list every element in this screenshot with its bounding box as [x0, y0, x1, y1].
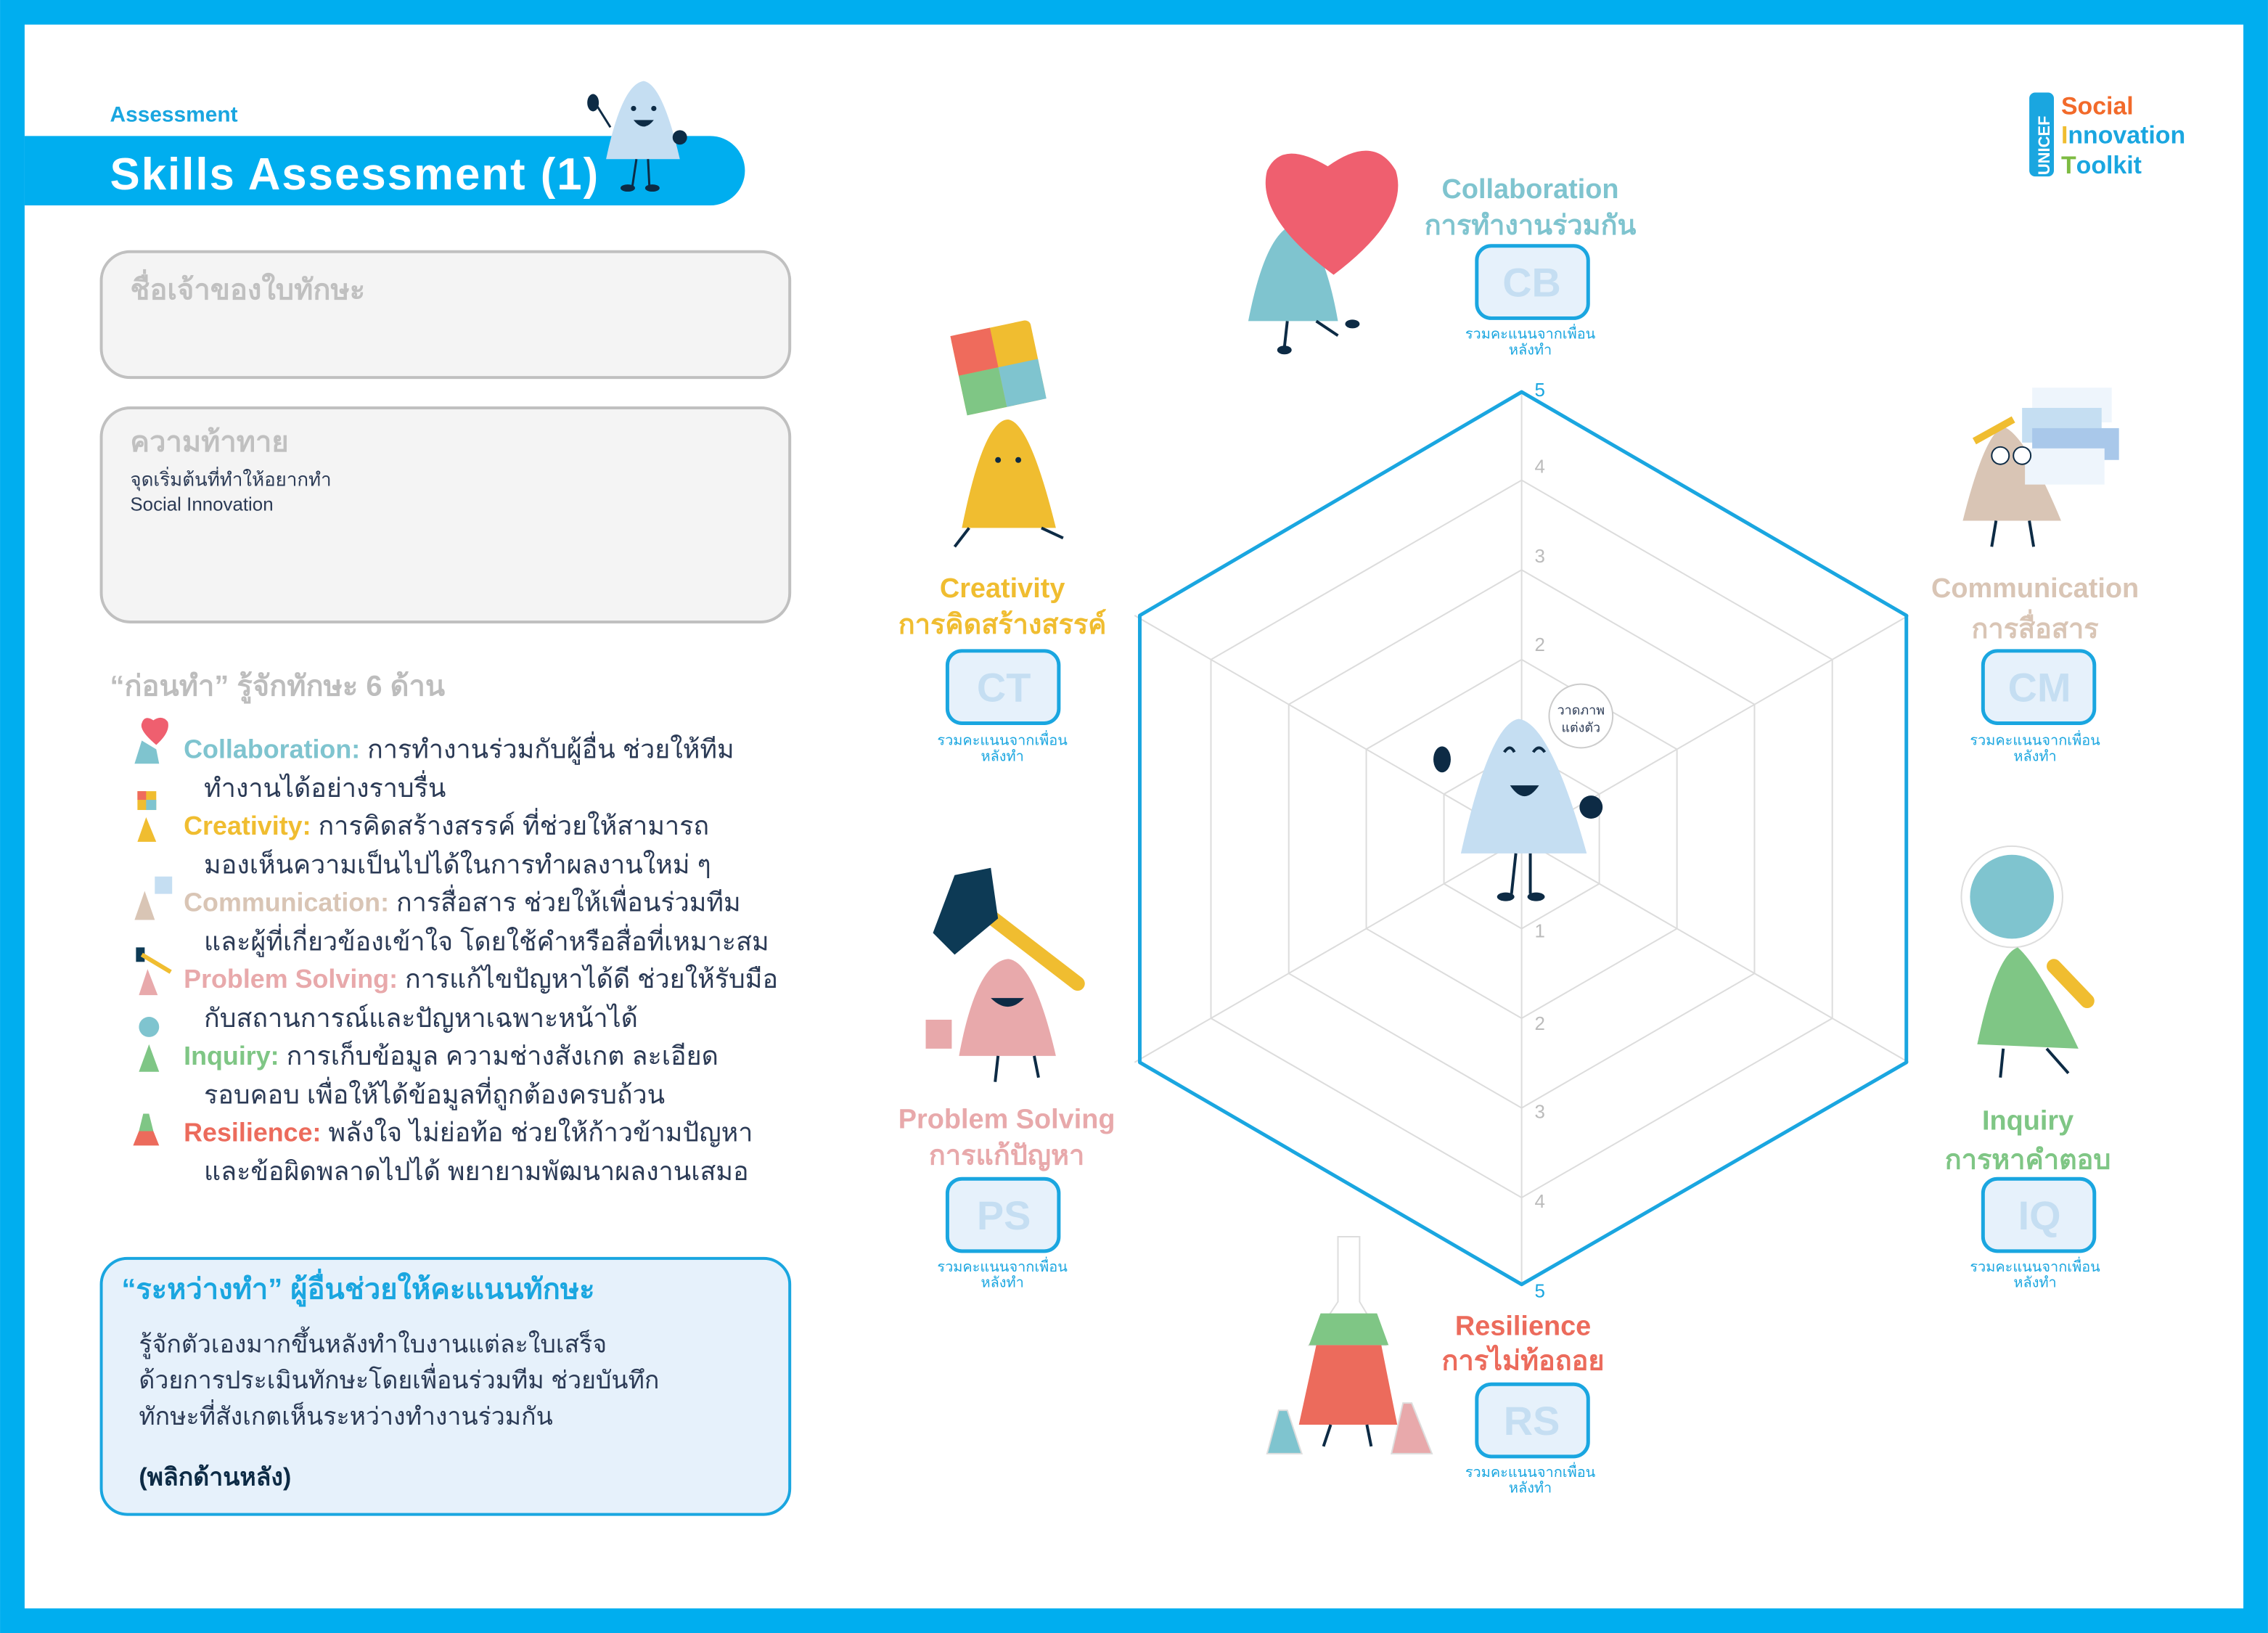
panel: challenge: Social Innovation: [130, 494, 274, 515]
skill: inquiry: IQ: [2018, 1192, 2061, 1238]
skill: problem solving: [898, 1104, 1115, 1291]
icon: heart character: [1248, 151, 1398, 354]
panel: during: [102, 1258, 790, 1515]
panel: during: รู้จักตัวเองมากขึ้นหลังทำใบงานแต่ละใบเสร็จ: [139, 1326, 607, 1359]
skill: collaboration: [1425, 174, 1637, 358]
center mascot with bubble: แต่งตัว: [1561, 720, 1600, 734]
radar chart: 3: [1535, 1102, 1545, 1123]
skill: communication: [1931, 573, 2139, 764]
skill: collaboration: Collaboration: [1442, 174, 1619, 205]
skill: inquiry: การหาคำตอบ: [1945, 1145, 2111, 1175]
icon: small puzzle: [137, 791, 156, 842]
skills list: Communication: การสื่อสาร ช่วยให้เพื่อนร่วมทีม: [184, 885, 741, 917]
center mascot with bubble: วาดภาพ: [1557, 703, 1605, 717]
panel: challenge: [102, 408, 790, 622]
skill: collaboration: รวมคะแนนจากเพื่อน: [1465, 323, 1596, 342]
panel: during: ด้วยการประเมินทักษะโดยเพื่อนร่วมทีม ช่วยบันทึก: [139, 1363, 659, 1394]
icon: papers character: [1962, 388, 2119, 547]
skill: communication: CM: [2008, 665, 2071, 711]
panel: during: ทักษะที่สังเกตเห็นระหว่างทำงานร่วมกัน: [139, 1399, 553, 1431]
skill: resilience: RS: [1504, 1398, 1560, 1444]
logo: Innovation: [2061, 121, 2185, 149]
skill: creativity: รวมคะแนนจากเพื่อน: [937, 729, 1068, 748]
skill: resilience: การไม่ท้อถอย: [1442, 1344, 1605, 1376]
skill: collaboration: CB: [1502, 260, 1561, 306]
skills list: Inquiry: การเก็บข้อมูล ความช่างสังเกต ละเอียด: [184, 1039, 719, 1071]
skill: problem solving: Problem Solving: [898, 1104, 1115, 1134]
icon: magnifier character: [1961, 846, 2087, 1078]
radar chart: 2: [1535, 1014, 1545, 1034]
skills list: ทำงานได้อย่างราบรื่น: [204, 770, 446, 803]
icon: small hammer: [136, 947, 171, 995]
icon: small heart: [134, 718, 168, 764]
radar chart: 2: [1535, 635, 1545, 655]
skill: problem solving: หลังทำ: [981, 1275, 1024, 1291]
panel: challenge: จุดเริ่มต้นที่ทำให้อยากทำ: [130, 467, 332, 491]
radar chart: 4: [1535, 1192, 1545, 1212]
skill: creativity: [898, 573, 1107, 764]
skills list: Creativity: การคิดสร้างสรรค์ ที่ช่วยให้สามารถ: [184, 808, 709, 840]
skill: creativity: CT: [977, 665, 1031, 711]
skill: creativity: Creativity: [940, 573, 1065, 604]
panel: during: (พลิกด้านหลัง): [139, 1464, 291, 1491]
skill: resilience: [1442, 1311, 1605, 1497]
skill: collaboration: หลังทำ: [1509, 342, 1552, 358]
skill: communication: การสื่อสาร: [1972, 609, 2099, 644]
skill: communication: หลังทำ: [2013, 748, 2057, 764]
logo: Social: [2061, 92, 2134, 120]
skill: resilience: Resilience: [1455, 1311, 1591, 1341]
panel: challenge: ความท้าทาย: [130, 426, 289, 458]
skill: problem solving: รวมคะแนนจากเพื่อน: [937, 1256, 1068, 1275]
radar chart: 5: [1535, 380, 1545, 401]
skills list: Problem Solving: การแก้ไขปัญหาได้ดี ช่วยให้รับมือ: [184, 964, 778, 994]
logo: Toolkit: [2061, 152, 2142, 179]
icon: header mascot: [587, 81, 687, 192]
icon: puzzle character: [950, 319, 1063, 547]
title bar: [25, 136, 745, 205]
skill: inquiry: Inquiry: [1982, 1105, 2073, 1136]
skill: inquiry: รวมคะแนนจากเพื่อน: [1970, 1256, 2100, 1275]
skills list: มองเห็นความเป็นไปได้ในการทำผลงานใหม่ ๆ: [204, 848, 711, 880]
title bar: Skills Assessment (1): [110, 150, 599, 200]
skill: problem solving: PS: [977, 1192, 1031, 1238]
radar chart: [1134, 380, 1909, 1302]
radar chart: 4: [1535, 457, 1545, 478]
skills list: [133, 718, 778, 1186]
radar chart: 1: [1535, 921, 1545, 941]
panel: owner name: [102, 252, 790, 377]
skills list: กับสถานการณ์และปัญหาเฉพาะหน้าได้: [204, 1003, 638, 1033]
center mascot with bubble: [1433, 684, 1613, 901]
heading: before: “ก่อนทำ” รู้จักทักษะ 6 ด้าน: [110, 671, 445, 704]
skill: communication: Communication: [1931, 573, 2139, 604]
panel: during: “ระหว่างทำ” ผู้อื่นช่วยให้คะแนนทักษะ: [121, 1269, 595, 1307]
radar chart: 5: [1535, 1282, 1545, 1302]
logo: UNICEF: [2035, 116, 2053, 175]
skills list: และข้อผิดพลาดไปได้ พยายามพัฒนาผลงานเสมอ: [204, 1156, 749, 1186]
skill: inquiry: [1945, 1105, 2111, 1291]
panel: owner name: ชื่อเจ้าของใบทักษะ: [130, 269, 365, 306]
skill: communication: รวมคะแนนจากเพื่อน: [1970, 729, 2100, 748]
skills list: รอบคอบ เพื่อให้ได้ข้อมูลที่ถูกต้องครบถ้วน: [204, 1077, 665, 1110]
icon: small magnifier: [139, 1017, 159, 1072]
icon: small papers: [134, 877, 172, 920]
logo: [2029, 92, 2185, 179]
skill: resilience: หลังทำ: [1509, 1481, 1552, 1497]
skill: problem solving: การแก้ปัญหา: [929, 1140, 1084, 1171]
skill: creativity: หลังทำ: [981, 748, 1024, 764]
skill: inquiry: หลังทำ: [2013, 1275, 2057, 1291]
icon: small flask: [133, 1114, 159, 1145]
skill: creativity: การคิดสร้างสรรค์: [898, 609, 1107, 640]
radar chart: 3: [1535, 547, 1545, 567]
skills list: และผู้ที่เกี่ยวข้องเข้าใจ โดยใช้คำหรือสื่อที่เหมาะสม: [204, 923, 769, 957]
icon: hammer character: [926, 868, 1078, 1082]
skill: resilience: รวมคะแนนจากเพื่อน: [1465, 1462, 1596, 1481]
header label: Assessment: [110, 102, 238, 126]
skills list: Resilience: พลังใจ ไม่ย่อท้อ ช่วยให้ก้าวข้ามปัญหา: [184, 1117, 753, 1147]
skills list: Collaboration: การทำงานร่วมกับผู้อื่น ช่วยให้ทีม: [184, 731, 734, 764]
icon: flask character: [1267, 1237, 1432, 1454]
skill: collaboration: การทำงานร่วมกัน: [1425, 210, 1637, 241]
